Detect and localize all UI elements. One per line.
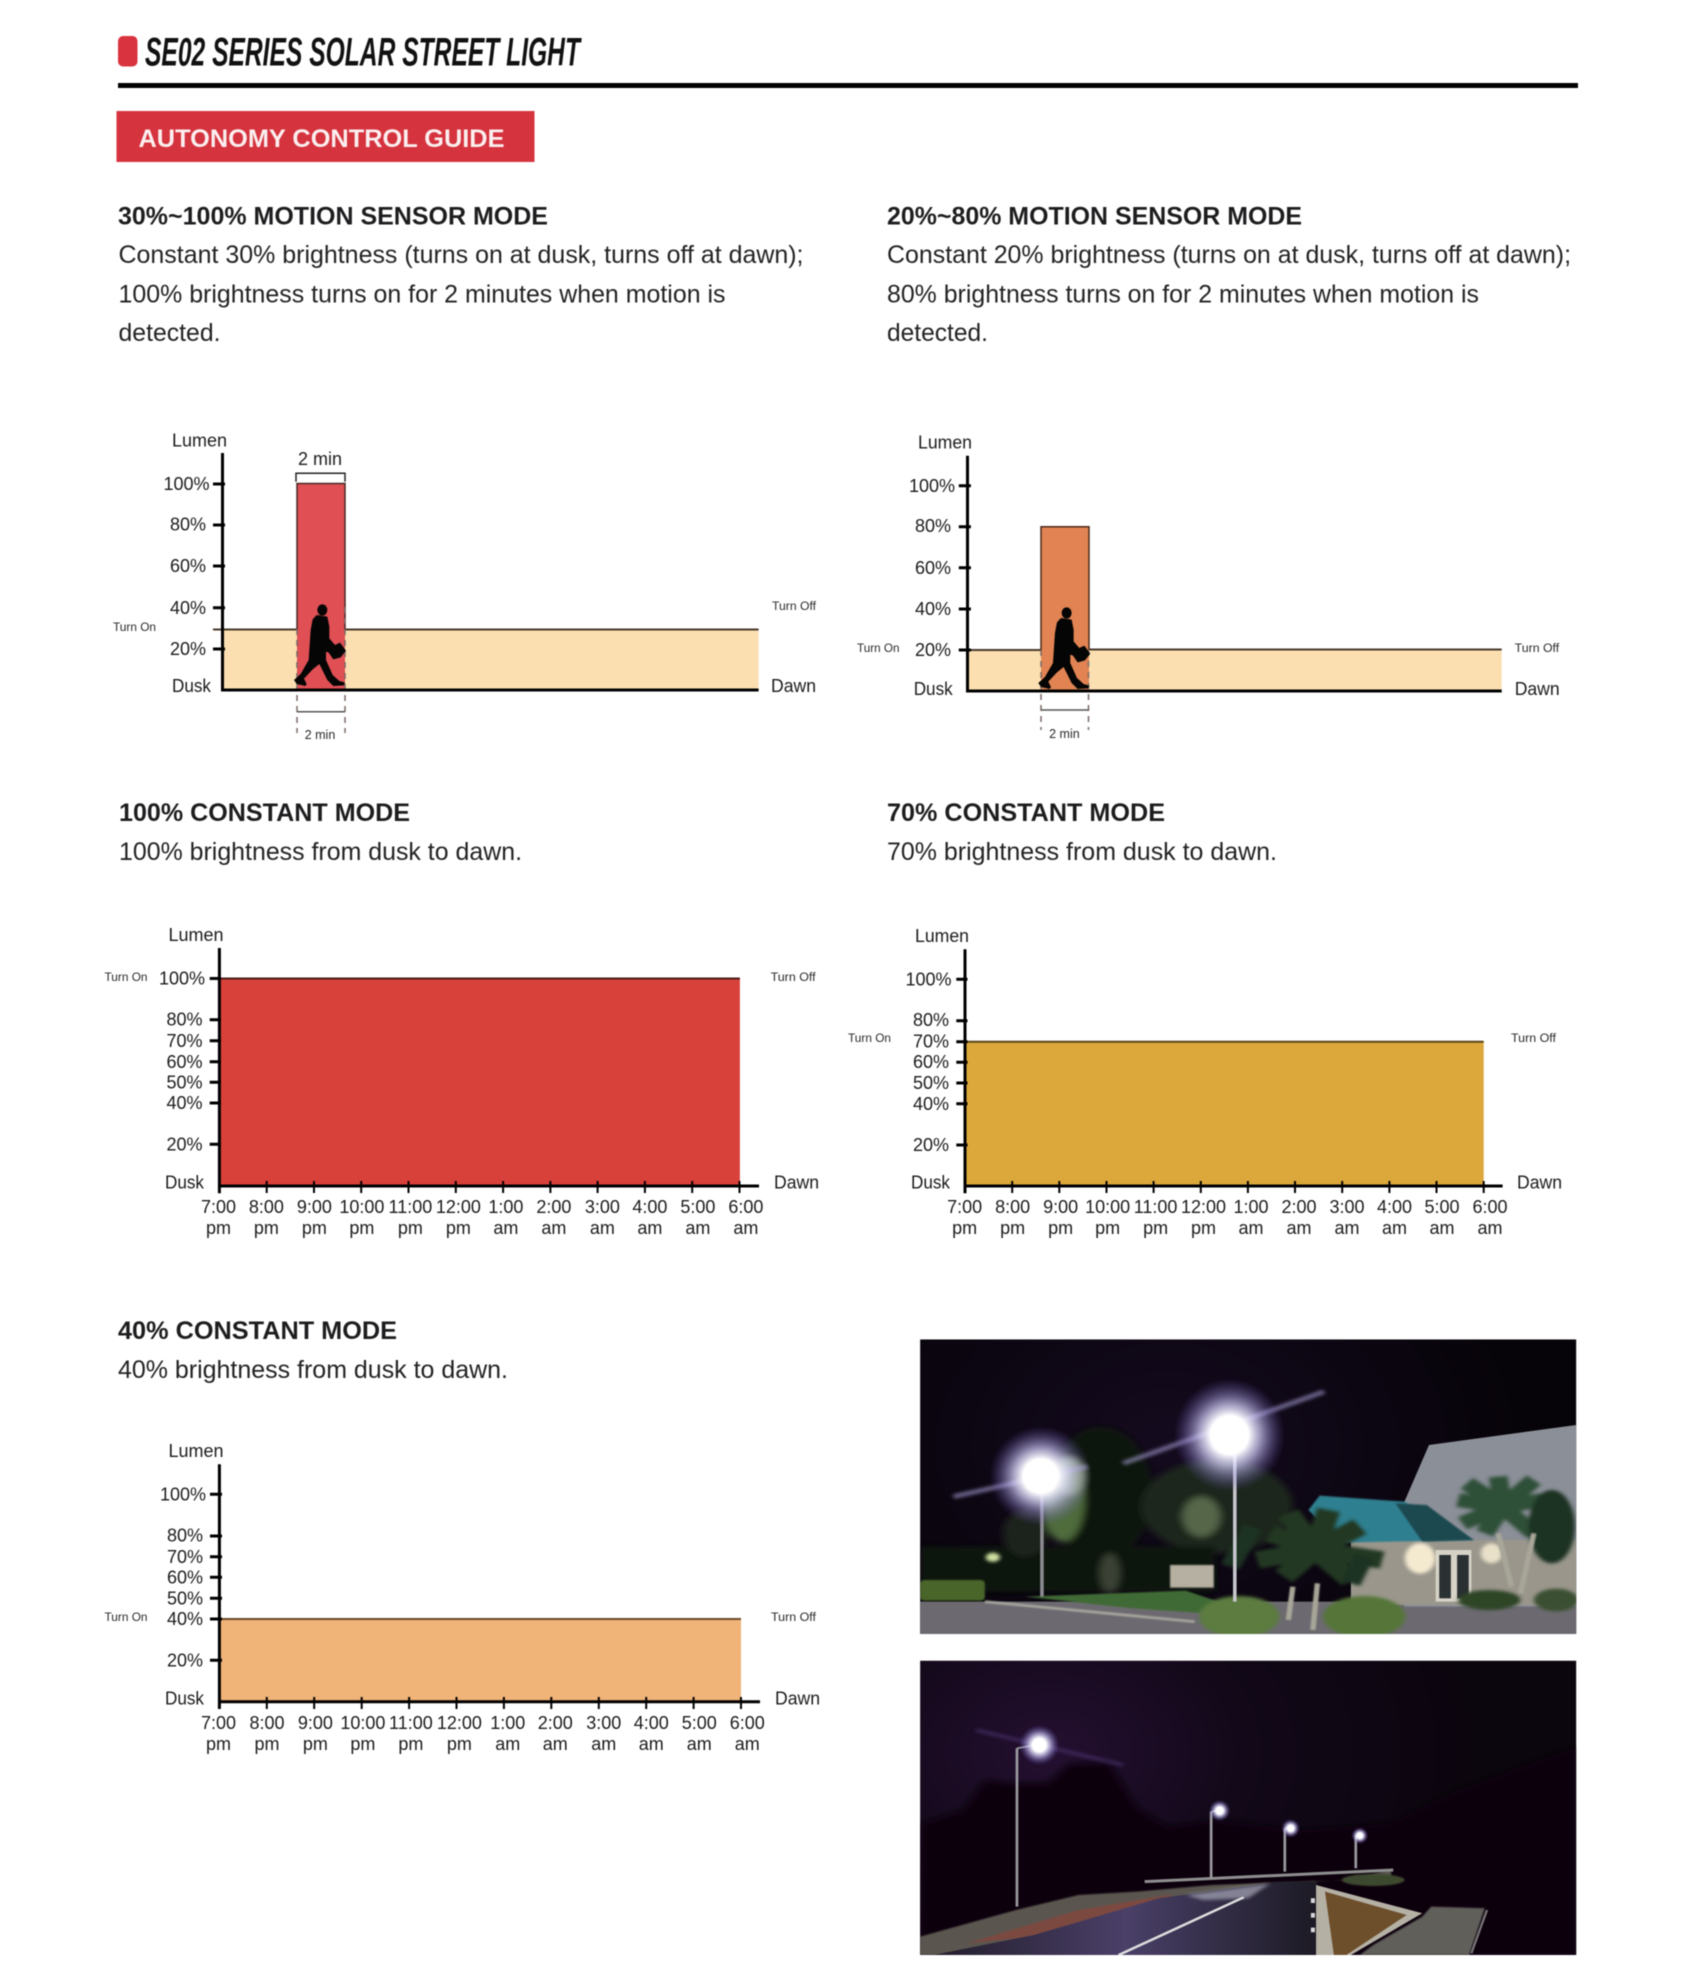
title xyxy=(118,30,582,74)
y labels xyxy=(159,925,819,1192)
light poles xyxy=(1232,1455,1238,1602)
time labels: pm xyxy=(206,1218,231,1238)
time labels: 4:00 xyxy=(634,1713,669,1733)
y labels: 100% xyxy=(159,968,205,988)
brightness area xyxy=(219,978,740,1186)
traffic island xyxy=(1316,1885,1422,1955)
time labels: 6:00 xyxy=(730,1713,765,1733)
time labels: pm xyxy=(446,1218,471,1238)
turn on and off labels: Turn Off xyxy=(771,1612,817,1624)
time labels: am xyxy=(590,1218,615,1238)
turn on and off labels: Turn Off xyxy=(1511,1033,1557,1045)
chart: 20% to 80% motion mode xyxy=(857,432,1560,741)
time labels: 10:00 xyxy=(1085,1197,1130,1217)
photo: road at night xyxy=(920,1661,1576,1955)
time labels: 1:00 xyxy=(490,1713,525,1733)
y labels: 60% xyxy=(913,1052,949,1072)
time labels: am xyxy=(493,1218,518,1238)
y labels: Dawn xyxy=(1517,1172,1562,1192)
time labels: am xyxy=(1477,1218,1503,1238)
icon: walking person xyxy=(1038,607,1090,689)
icon: walking person xyxy=(294,604,346,686)
y labels: 20% xyxy=(913,1135,949,1155)
x ticks xyxy=(267,1181,740,1193)
y labels: 40% xyxy=(167,1609,203,1629)
description: 80% brightness turns on for 2 minutes when motion is xyxy=(887,282,1479,308)
motion dashed guides xyxy=(297,607,345,733)
time labels: am xyxy=(1334,1218,1360,1238)
road verge and surface xyxy=(920,1870,1391,1955)
axes xyxy=(959,456,1502,691)
time labels: pm xyxy=(350,1734,375,1754)
time labels: am xyxy=(687,1734,712,1754)
time labels: 7:00 xyxy=(201,1713,236,1733)
description: 100% brightness from dusk to dawn. xyxy=(119,839,522,866)
axis labels: 20% xyxy=(170,639,206,659)
time labels: am xyxy=(1286,1218,1312,1238)
time labels: am xyxy=(685,1218,710,1238)
y labels: 70% xyxy=(167,1547,203,1567)
time labels: am xyxy=(639,1734,664,1754)
time labels: 8:00 xyxy=(249,1197,284,1217)
y labels: 80% xyxy=(913,1010,949,1030)
motion pulse bar xyxy=(297,484,345,690)
y labels: Dusk xyxy=(911,1172,951,1192)
palms and shrubs xyxy=(1199,1477,1579,1637)
y labels xyxy=(160,1441,820,1708)
time labels: 10:00 xyxy=(340,1713,385,1733)
turn on and off labels xyxy=(857,643,1560,741)
time labels: 7:00 xyxy=(201,1197,236,1217)
x ticks xyxy=(1012,1181,1484,1193)
panel: 40% constant mode xyxy=(104,1318,820,1754)
time labels: pm xyxy=(952,1218,977,1238)
time labels: 1:00 xyxy=(1233,1197,1269,1217)
axis labels: 60% xyxy=(170,556,206,576)
time labels: 12:00 xyxy=(436,1197,481,1217)
header rule xyxy=(118,83,1578,88)
2 min bracket xyxy=(296,473,345,482)
time labels: 4:00 xyxy=(1377,1197,1412,1217)
photo: street lights at building xyxy=(920,1339,1579,1637)
y labels: 50% xyxy=(166,1072,202,1092)
turn on and off labels xyxy=(113,601,817,742)
description: 70% brightness from dusk to dawn. xyxy=(887,839,1277,866)
heading: 70% CONSTANT MODE xyxy=(887,800,1165,827)
y labels: Lumen xyxy=(168,1441,224,1461)
panel: 30%~100% motion sensor mode xyxy=(113,204,817,742)
y labels: Dawn xyxy=(775,1688,820,1708)
turn on and off labels: Turn Off xyxy=(1515,643,1560,655)
time labels: 3:00 xyxy=(585,1197,620,1217)
turn on and off labels: Turn On xyxy=(104,1612,148,1624)
y labels: 60% xyxy=(166,1052,202,1072)
axis labels: Lumen xyxy=(918,432,972,452)
y labels: Dusk xyxy=(165,1688,205,1708)
motion pulse bar xyxy=(1041,527,1089,691)
description: Constant 20% brightness (turns on at dusk, turns off at dawn); xyxy=(887,242,1571,269)
turn on and off labels: Turn On xyxy=(113,622,156,634)
axis labels: 20% xyxy=(915,640,951,660)
tree line xyxy=(920,1747,1576,1955)
time labels: pm xyxy=(1048,1218,1073,1238)
time labels: am xyxy=(591,1734,616,1754)
axis labels: 100% xyxy=(909,476,955,496)
chart: 100% constant xyxy=(104,925,819,1238)
axis labels: Lumen xyxy=(172,430,227,450)
axis labels: 100% xyxy=(163,474,210,494)
time labels: 1:00 xyxy=(488,1197,523,1217)
axis labels: 40% xyxy=(170,598,206,618)
time labels: 6:00 xyxy=(1472,1197,1508,1217)
time labels: 4:00 xyxy=(632,1197,667,1217)
time labels: am xyxy=(735,1734,760,1754)
time labels: 12:00 xyxy=(1181,1197,1226,1217)
y labels: Dawn xyxy=(774,1172,819,1192)
description: 100% brightness turns on for 2 minutes when motion is xyxy=(118,282,726,308)
turn on and off labels xyxy=(104,972,816,984)
icon: red title marker xyxy=(118,36,138,66)
time labels: pm xyxy=(254,1734,280,1754)
time labels: am xyxy=(541,1218,566,1238)
time labels: 9:00 xyxy=(297,1197,332,1217)
axis labels: 80% xyxy=(170,514,206,534)
description: detected. xyxy=(887,320,988,347)
time labels: am xyxy=(637,1218,662,1238)
turn on and off labels: 2 min xyxy=(305,728,335,742)
y labels: 50% xyxy=(167,1588,203,1608)
time labels: 9:00 xyxy=(1043,1197,1078,1217)
light glow xyxy=(1123,1392,1324,1463)
building xyxy=(1404,1425,1576,1607)
time labels: am xyxy=(1382,1218,1407,1238)
y labels: Lumen xyxy=(915,926,969,946)
axes xyxy=(956,949,1503,1193)
y labels: 80% xyxy=(166,1010,202,1030)
chart: 40% constant xyxy=(104,1441,820,1754)
x ticks xyxy=(267,1697,741,1709)
brightness area xyxy=(219,1619,741,1702)
time labels: pm xyxy=(398,1734,423,1754)
time labels xyxy=(947,1197,1508,1238)
chart: 30% to 100% motion mode xyxy=(113,430,817,742)
title text: SE02 SERIES SOLAR STREET LIGHT xyxy=(145,30,582,74)
time labels: pm xyxy=(447,1734,472,1754)
panel: 100% constant mode xyxy=(104,800,819,1238)
axis labels: Dusk xyxy=(914,679,954,699)
axes xyxy=(210,948,759,1193)
y labels: 20% xyxy=(166,1134,202,1154)
y labels: Lumen xyxy=(168,925,224,945)
time labels: 2:00 xyxy=(1281,1197,1317,1217)
turn on and off labels: Turn Off xyxy=(772,601,817,613)
motion dashed guides xyxy=(1041,650,1088,730)
time labels: am xyxy=(733,1218,758,1238)
time labels xyxy=(201,1713,765,1754)
time labels: 8:00 xyxy=(249,1713,285,1733)
time labels: am xyxy=(1429,1218,1455,1238)
axis labels xyxy=(163,430,816,696)
time labels: am xyxy=(495,1734,520,1754)
time labels: 2:00 xyxy=(538,1713,573,1733)
section banner: autonomy control guide: AUTONOMY CONTROL GUIDE xyxy=(138,125,504,153)
time labels: 3:00 xyxy=(1329,1197,1365,1217)
y labels: 40% xyxy=(166,1093,202,1113)
turn on and off labels: Turn Off xyxy=(771,972,816,984)
axis labels: Dawn xyxy=(1515,679,1560,699)
axis labels: Dawn xyxy=(771,676,816,696)
y labels: 70% xyxy=(913,1032,949,1052)
chart: 70% constant xyxy=(848,926,1562,1238)
brightness area xyxy=(965,1042,1484,1186)
axis labels: 2 min xyxy=(298,449,342,469)
time labels: 5:00 xyxy=(682,1713,717,1733)
y labels: 50% xyxy=(913,1073,949,1093)
time labels: 12:00 xyxy=(437,1713,482,1733)
palm trunks xyxy=(1288,1533,1534,1630)
turn on and off labels: Turn On xyxy=(857,643,900,655)
time labels: pm xyxy=(302,1218,327,1238)
time labels: pm xyxy=(398,1218,423,1238)
time labels: pm xyxy=(206,1734,231,1754)
time labels: 5:00 xyxy=(1424,1197,1460,1217)
axis labels xyxy=(909,432,1560,699)
time labels: 9:00 xyxy=(298,1713,333,1733)
light poles xyxy=(1017,1748,1356,1907)
axis labels: 80% xyxy=(915,516,951,536)
light glow xyxy=(976,1730,1123,1765)
axes xyxy=(213,453,759,690)
time labels: am xyxy=(543,1734,568,1754)
section banner: autonomy control guide xyxy=(116,111,534,162)
y labels: Dusk xyxy=(165,1172,205,1192)
time labels: 7:00 xyxy=(947,1197,982,1217)
time labels: pm xyxy=(1000,1218,1025,1238)
turn on and off labels: Turn On xyxy=(848,1033,891,1045)
description xyxy=(887,242,1571,347)
time labels: pm xyxy=(1095,1218,1120,1238)
axis labels: Dusk xyxy=(172,676,212,696)
y labels: 100% xyxy=(905,970,952,990)
turn on and off labels xyxy=(104,1612,817,1624)
time labels: 10:00 xyxy=(339,1197,384,1217)
panel: 70% constant mode xyxy=(848,800,1562,1238)
time labels: 6:00 xyxy=(728,1197,763,1217)
axis labels: 40% xyxy=(915,599,951,619)
time labels: 2:00 xyxy=(536,1197,571,1217)
description: Constant 30% brightness (turns on at dusk, turns off at dawn); xyxy=(118,242,804,269)
time labels: 11:00 xyxy=(1134,1197,1177,1217)
description: detected. xyxy=(118,320,220,347)
turn on and off labels xyxy=(848,1033,1557,1045)
2 min lower span xyxy=(297,711,345,713)
turn on and off labels: 2 min xyxy=(1049,727,1080,741)
time labels: pm xyxy=(349,1218,374,1238)
time labels: pm xyxy=(1191,1218,1216,1238)
y labels xyxy=(905,926,1562,1192)
y labels: 70% xyxy=(166,1031,202,1051)
y labels: 80% xyxy=(167,1526,203,1546)
turn on and off labels: Turn On xyxy=(104,972,148,984)
base brightness area xyxy=(968,650,1502,691)
time labels: pm xyxy=(303,1734,328,1754)
heading: 20%~80% MOTION SENSOR MODE xyxy=(887,204,1302,230)
description: 40% brightness from dusk to dawn. xyxy=(118,1357,508,1384)
time labels: pm xyxy=(254,1218,279,1238)
time labels: 3:00 xyxy=(586,1713,621,1733)
heading: 100% CONSTANT MODE xyxy=(119,800,410,827)
y labels: 60% xyxy=(167,1568,203,1588)
y labels: 40% xyxy=(913,1094,949,1114)
heading: 30%~100% MOTION SENSOR MODE xyxy=(118,204,548,230)
description xyxy=(118,242,804,347)
time labels: 5:00 xyxy=(680,1197,715,1217)
ground and lawn xyxy=(920,1602,1576,1634)
heading: 40% CONSTANT MODE xyxy=(118,1318,397,1345)
time labels xyxy=(201,1197,763,1238)
time labels: 11:00 xyxy=(389,1713,433,1733)
axis labels: 60% xyxy=(915,558,951,578)
time labels: 8:00 xyxy=(995,1197,1030,1217)
panel: 20%~80% motion sensor mode xyxy=(857,204,1571,741)
y labels: 100% xyxy=(160,1484,206,1504)
2 min lower span xyxy=(1041,709,1088,711)
y labels: 20% xyxy=(167,1650,203,1670)
time labels: am xyxy=(1238,1218,1264,1238)
axes xyxy=(210,1464,760,1709)
base brightness area xyxy=(223,630,759,690)
time labels: pm xyxy=(1143,1218,1168,1238)
time labels: 11:00 xyxy=(389,1197,432,1217)
